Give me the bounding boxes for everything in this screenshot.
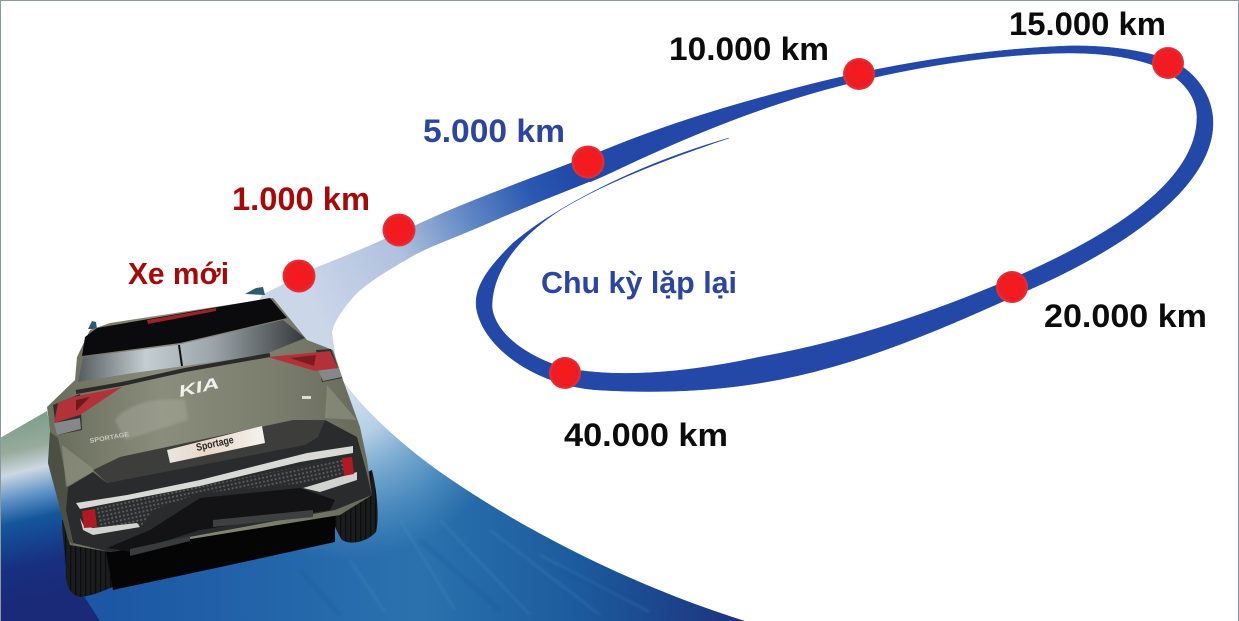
right rear tyre (325, 470, 378, 543)
road (0, 370, 745, 621)
label: Chu kỳ lặp lại: Chu kỳ lặp lại (541, 265, 737, 300)
dark tailgate recess (93, 420, 325, 483)
label: 15.000 km: 15.000 km (1009, 6, 1166, 42)
brake light (147, 308, 216, 324)
rear diffuser (107, 488, 335, 552)
bumper grille (95, 458, 343, 528)
lead-in ribbon from new car to 5.000 km (240, 152, 606, 385)
Kia logo: KIA (177, 375, 221, 401)
label: 5.000 km: 5.000 km (423, 113, 565, 149)
dark left body side (48, 432, 73, 545)
label: Xe mới: Xe mới (128, 256, 229, 291)
milestone marker: 20.000 km (996, 271, 1028, 303)
license plate (167, 426, 265, 463)
milestone marker: 40.000 km (549, 357, 581, 389)
milestone marker: 1.000 km (382, 214, 416, 246)
mirrors and roof rails (88, 287, 265, 329)
trim badge (302, 396, 311, 399)
label: 20.000 km: 20.000 km (1044, 298, 1207, 334)
reflection on tailgate (115, 399, 188, 440)
dark lower bumper band (66, 420, 372, 552)
milestone marker: 5.000 km (572, 146, 604, 178)
milestone marker: Xe mới (282, 260, 316, 292)
plate text: Sportage (195, 434, 235, 454)
label: 40.000 km: 40.000 km (564, 417, 728, 453)
repeating maintenance loop (476, 46, 1213, 392)
right reflector (342, 457, 354, 476)
body shell (47, 298, 372, 552)
left lower chrome (80, 518, 140, 535)
left rear tyre (62, 520, 118, 597)
car: rear view of Kia Sportage (47, 287, 378, 597)
tailgate trim (76, 355, 270, 392)
underbody shadow (105, 490, 335, 590)
left reflector (82, 509, 97, 528)
model badge: SPORTAGE (89, 431, 130, 445)
rear spoiler (82, 298, 287, 356)
label: 10.000 km: 10.000 km (669, 31, 829, 67)
right lower chrome (303, 472, 357, 492)
milestone marker: 15.000 km (1152, 47, 1184, 79)
chrome strip (76, 446, 353, 509)
left tail light (53, 387, 122, 435)
milestone marker: 10.000 km (843, 58, 875, 90)
window wiper (179, 345, 182, 366)
rear window (78, 320, 305, 382)
right tail light (268, 349, 342, 382)
label: 1.000 km: 1.000 km (232, 181, 370, 217)
lighter side band (62, 385, 357, 487)
